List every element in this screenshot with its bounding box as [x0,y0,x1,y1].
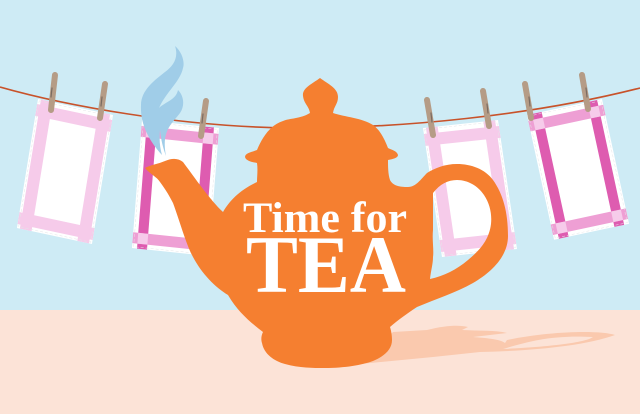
tea towel 3 [423,120,517,257]
title: Time for: Time for [243,195,407,242]
sky background [0,0,640,310]
teapot shadow [360,326,615,364]
title: TEA: TEA [246,219,406,310]
tea towel 4 [527,99,629,240]
tea towel 2 [132,120,219,256]
clothesline [0,87,640,128]
table surface [0,310,640,414]
tea towel 1 [17,99,113,244]
clothes pegs [51,75,588,136]
steam [141,46,184,156]
teapot [145,78,508,368]
